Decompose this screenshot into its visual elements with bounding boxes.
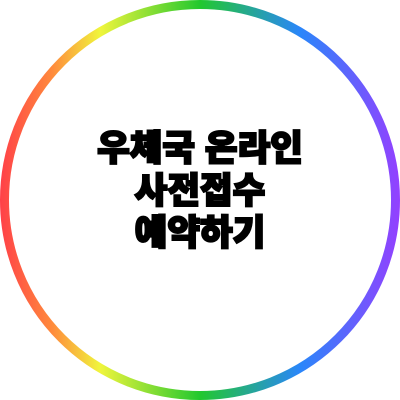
- title: [97, 128, 303, 252]
- title: 사전접수: [135, 170, 265, 210]
- title: 예약하기: [135, 212, 265, 252]
- title: 우체국 온라인: [97, 128, 303, 168]
